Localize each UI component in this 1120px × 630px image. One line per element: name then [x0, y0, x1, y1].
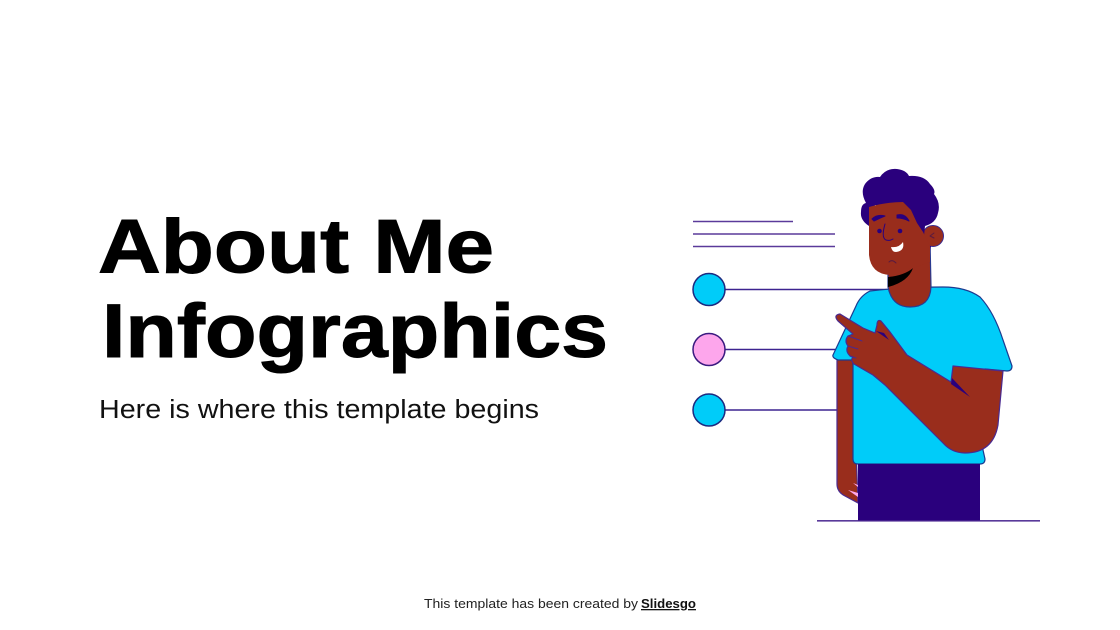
- ear detail: [930, 233, 934, 238]
- text placeholder lines: [693, 222, 835, 246]
- fingers of the lower hand: [848, 483, 858, 497]
- face: [869, 202, 930, 275]
- nose: [883, 224, 893, 240]
- title: Infographics: [102, 289, 608, 374]
- list item: blue bullet one: [693, 274, 890, 306]
- collar shadow: [888, 268, 913, 287]
- hair: [861, 169, 939, 236]
- hair shadow behind the ear: [926, 246, 931, 256]
- ground line: [817, 520, 1040, 522]
- thumb shadow: [876, 331, 889, 340]
- lip: [889, 261, 896, 263]
- underarm shadow: [951, 378, 970, 397]
- illustration: pointing man: [833, 169, 1012, 520]
- title: About Me: [98, 204, 494, 290]
- title: [98, 204, 608, 374]
- right arm and hand: [836, 314, 1003, 453]
- neck: [888, 240, 931, 307]
- shirt: [833, 287, 1012, 464]
- left arm: [837, 358, 858, 503]
- footer credit: This template has been created by: [424, 596, 639, 611]
- trousers: [858, 464, 980, 520]
- eyes: [877, 229, 882, 233]
- list item: pink bullet: [693, 334, 838, 366]
- finger creases: [848, 336, 862, 358]
- subtitle: Here is where this template begins: [99, 396, 539, 424]
- ear: [922, 226, 944, 246]
- smile: [891, 242, 903, 252]
- eyebrows: [872, 215, 909, 221]
- footer credit: Slidesgo: [641, 596, 696, 611]
- list item: blue bullet two: [693, 394, 838, 426]
